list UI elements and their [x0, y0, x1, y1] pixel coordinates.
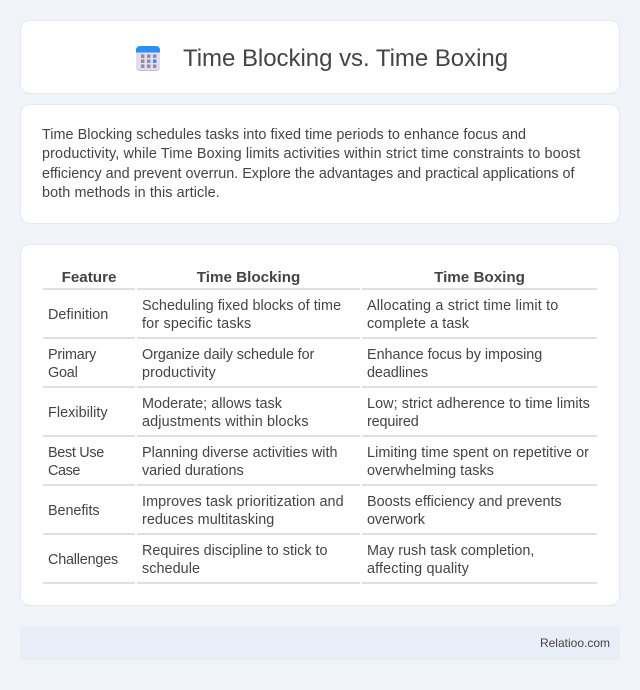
text block: introduction: productivity, while Time Boxing limits activities within strict time constraints to boost — [42, 146, 580, 162]
row: Benefits: overwork — [367, 512, 425, 528]
row: Primary Goal — [43, 347, 597, 388]
panel: title card — [20, 20, 620, 94]
text block: introduction: efficiency and prevent overrun. Explore the advantages and practical applications of — [42, 166, 574, 182]
row: Benefits: Improves task prioritization and — [142, 494, 344, 510]
row: Definition: for specific tasks — [142, 316, 251, 332]
row: Primary Goal: Primary — [48, 347, 96, 363]
row: Definition: Allocating a strict time limit to — [367, 298, 558, 314]
row: Best Use Case: overwhelming tasks — [367, 463, 494, 479]
row: Flexibility: Low; strict adherence to time limits — [367, 396, 590, 412]
row: Challenges: May rush task completion, — [367, 543, 534, 559]
comparison table — [43, 269, 597, 584]
text block: introduction: both methods in this article. — [42, 185, 220, 201]
row: Flexibility: Flexibility — [48, 405, 108, 421]
row: Benefits: Benefits — [48, 503, 100, 519]
row: Best Use Case: Case — [48, 463, 80, 479]
row: Best Use Case: Limiting time spent on repetitive or — [367, 445, 589, 461]
row: Best Use Case — [43, 445, 597, 486]
icon: calendar — [136, 46, 160, 71]
row: Best Use Case: Planning diverse activities with — [142, 445, 338, 461]
row: Challenges: Challenges — [48, 552, 118, 568]
panel: comparison table card — [20, 244, 620, 606]
row: Flexibility — [43, 396, 597, 437]
row: Definition: Scheduling fixed blocks of time — [142, 298, 341, 314]
table header: Time Boxing — [434, 269, 525, 286]
text block: introduction: Time Blocking schedules tasks into fixed time periods to enhance focus and — [42, 127, 526, 143]
table header: Time Blocking — [197, 269, 300, 286]
row: Challenges: Requires discipline to stick to — [142, 543, 328, 559]
row: Definition — [43, 298, 597, 339]
row: Flexibility: adjustments within blocks — [142, 414, 309, 430]
table header — [43, 269, 597, 290]
row: Definition: Definition — [48, 307, 108, 323]
footer: source bar — [20, 626, 620, 660]
row: Primary Goal: Organize daily schedule for — [142, 347, 314, 363]
row: Benefits: reduces multitasking — [142, 512, 274, 528]
row: Flexibility: Moderate; allows task — [142, 396, 282, 412]
text block: introduction — [42, 127, 580, 201]
table header: Feature — [62, 269, 116, 286]
row: Primary Goal: productivity — [142, 365, 216, 381]
panel: intro card — [20, 104, 620, 224]
row: Benefits: Boosts efficiency and prevents — [367, 494, 562, 510]
row: Challenges — [43, 543, 597, 584]
footer text: Relatioo.com — [540, 636, 610, 650]
row: Definition: complete a task — [367, 316, 469, 332]
row: Flexibility: required — [367, 414, 419, 430]
title: Time Blocking vs. Time Boxing — [183, 45, 508, 72]
row: Challenges: affecting quality — [367, 561, 469, 577]
row: Primary Goal: deadlines — [367, 365, 428, 381]
row: Best Use Case: varied durations — [142, 463, 244, 479]
row: Best Use Case: Best Use — [48, 445, 104, 461]
row: Challenges: schedule — [142, 561, 200, 577]
row: Benefits — [43, 494, 597, 535]
row: Primary Goal: Enhance focus by imposing — [367, 347, 542, 363]
row: Primary Goal: Goal — [48, 365, 78, 381]
